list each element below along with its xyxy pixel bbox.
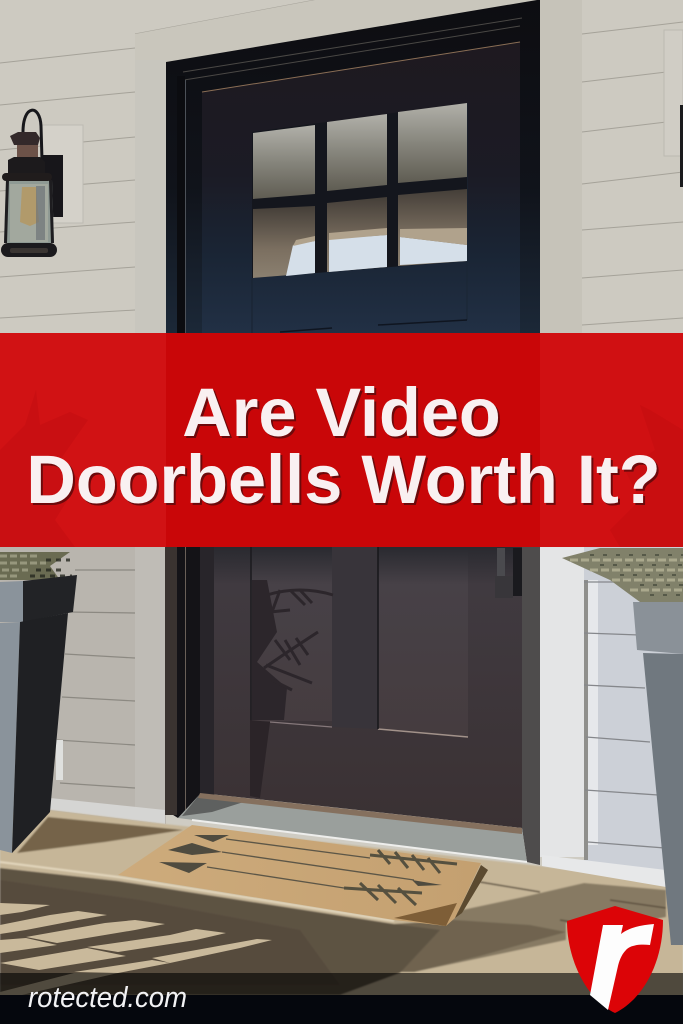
upper siding wall [0,0,683,340]
lower right trim and siding [540,545,683,887]
logo shield [567,906,663,1013]
door trim [135,0,582,340]
wall lantern [1,110,63,257]
dark footer strips [0,973,683,1024]
red title band [0,333,683,547]
website address: rotected.com [28,982,187,1014]
door upper slab [202,42,520,340]
title: Doorbells Worth It? [26,441,661,518]
shaded boards right of mat [300,883,666,972]
plant shadow on door [252,580,333,720]
sunlight stripes on deck [0,903,272,1000]
arrow pattern on mat [159,835,457,905]
lower door frame [165,545,540,865]
logo letter r [590,924,654,1010]
large diagonal shadow [0,868,440,995]
title: Are Video [182,374,501,451]
planter: left [0,552,77,853]
lower left siding [0,545,166,824]
door lower slab [200,545,522,828]
shaded boards beneath planter [17,817,183,853]
title [26,374,661,518]
planter: right [562,548,683,945]
door frame [166,0,540,340]
coir door mat [118,825,488,926]
door handle [495,548,522,598]
porch deck [0,810,683,1024]
door window [252,103,467,278]
door threshold and sill [178,793,527,862]
